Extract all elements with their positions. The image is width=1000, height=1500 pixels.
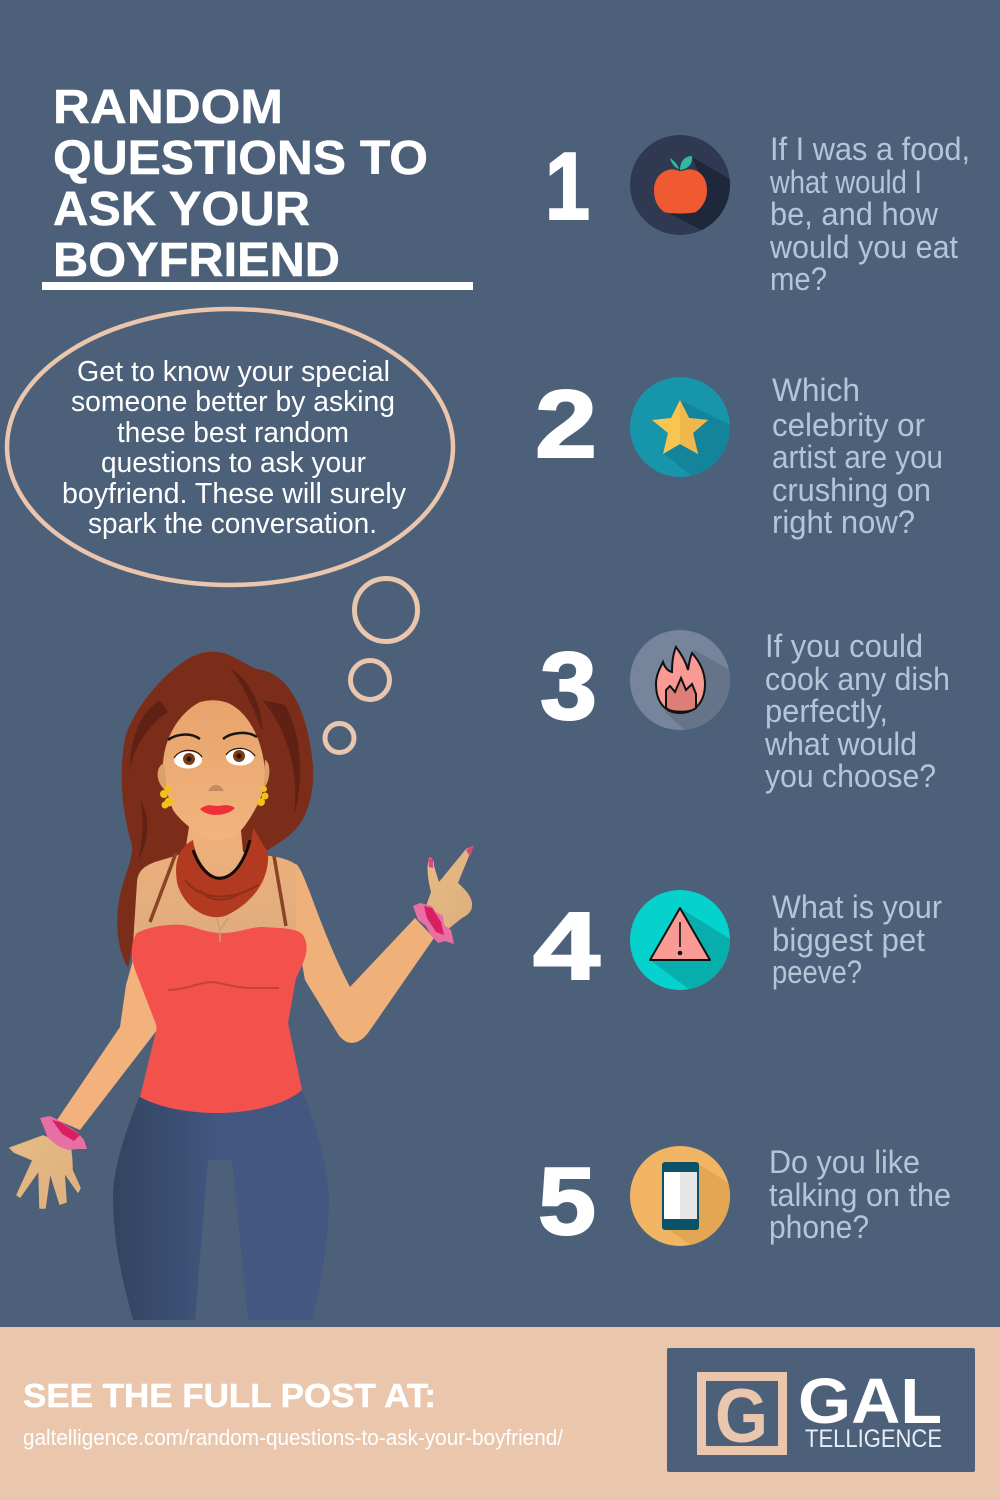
straps <box>150 853 286 926</box>
scarf <box>176 827 268 917</box>
question 2 text: celebrity or <box>772 407 925 443</box>
scarf folds <box>185 880 258 900</box>
hair <box>117 652 313 968</box>
logo square <box>702 1376 782 1450</box>
number 4: 4 <box>533 893 600 1000</box>
question 5 text: phone? <box>769 1209 869 1245</box>
torso and neck skin <box>132 820 308 985</box>
nails <box>428 845 474 868</box>
question 1 text: would you eat <box>769 229 958 265</box>
jeans <box>113 1090 329 1320</box>
intro text: someone better by asking <box>71 386 395 418</box>
question 3 text: If you could <box>765 628 923 664</box>
intro text: boyfriend. These will surely <box>62 478 406 510</box>
top seam <box>168 982 279 990</box>
title: BOYFRIEND <box>53 234 340 287</box>
ears <box>158 760 269 792</box>
icon: flame <box>630 630 730 730</box>
question list <box>533 131 970 1255</box>
icon: apple <box>630 135 730 235</box>
question 4 text <box>772 889 942 990</box>
nose <box>208 785 224 791</box>
number 5: 5 <box>538 1148 596 1255</box>
number 2: 2 <box>535 371 597 478</box>
item 2 <box>535 371 943 540</box>
question 2 text: right now? <box>772 504 915 540</box>
question 5 text: talking on the <box>769 1177 951 1213</box>
question 4 text: biggest pet <box>772 922 925 958</box>
item 3 <box>540 628 950 794</box>
title: ASK YOUR <box>53 183 310 236</box>
footer url: galtelligence.com/random-questions-to-ask-your-boyfriend/ <box>23 1425 564 1450</box>
pointing hand <box>424 846 473 930</box>
question 1 text <box>769 131 970 297</box>
footer band <box>0 1327 1000 1500</box>
question 3 text: cook any dish <box>765 661 950 697</box>
speech oval <box>7 309 453 585</box>
number 1: 1 <box>545 133 590 240</box>
intro text: Get to know your special <box>77 356 390 388</box>
question 2 text <box>772 372 943 540</box>
question 1 text: me? <box>770 261 827 297</box>
question 4 text: peeve? <box>772 954 862 990</box>
item 5 <box>540 1146 950 1246</box>
thought circles <box>325 578 418 752</box>
intro text: spark the conversation. <box>88 508 377 540</box>
necklace <box>217 918 228 942</box>
question 2 text: crushing on <box>772 472 931 508</box>
logo G: G <box>715 1374 768 1459</box>
icon: star <box>630 377 730 477</box>
left wrist scrunchie <box>40 1116 87 1150</box>
question 3 text: what would <box>764 726 917 762</box>
brows <box>168 733 257 740</box>
title: RANDOM <box>53 81 283 134</box>
intro text: questions to ask your <box>101 447 366 479</box>
logo TELLIGENCE: TELLIGENCE <box>805 1425 942 1453</box>
question 1 text: what would I <box>769 164 922 200</box>
question 1 text: If I was a food, <box>770 131 970 167</box>
thought bubble <box>7 309 453 752</box>
eyes <box>174 748 255 768</box>
earrings <box>160 786 268 808</box>
lips <box>200 805 235 815</box>
face <box>163 700 265 840</box>
icon: phone <box>630 1146 730 1246</box>
question 4 text: What is your <box>772 889 942 925</box>
scarf neckline <box>193 840 250 878</box>
question 3 text: you choose? <box>765 758 936 794</box>
logo GAL: GAL <box>798 1365 942 1437</box>
footer call to action: SEE THE FULL POST AT: <box>23 1377 436 1414</box>
red top <box>132 925 307 1113</box>
intro text: these best random <box>117 417 349 449</box>
title: QUESTIONS TO <box>53 132 428 185</box>
left hand <box>10 1136 80 1208</box>
question 5 text <box>769 1144 951 1245</box>
hair strands <box>130 668 300 860</box>
icon: warning triangle <box>630 890 730 990</box>
logo <box>667 1348 975 1472</box>
question 3 text: perfectly, <box>765 693 888 729</box>
item 1 <box>545 131 970 297</box>
viewer-left arm <box>57 960 157 1130</box>
item 4 <box>534 890 942 990</box>
question 3 text <box>764 628 950 794</box>
question 5 text: Do you like <box>769 1144 920 1180</box>
intro text <box>62 356 406 540</box>
right wrist scrunchie <box>413 903 454 944</box>
number 3: 3 <box>540 633 597 740</box>
question 1 text: be, and how <box>770 196 939 232</box>
viewer-right arm <box>296 864 434 1043</box>
woman illustration <box>10 652 474 1320</box>
question 2 text: artist are you <box>772 439 943 475</box>
question 2 text: Which <box>772 372 860 408</box>
title <box>42 81 473 290</box>
